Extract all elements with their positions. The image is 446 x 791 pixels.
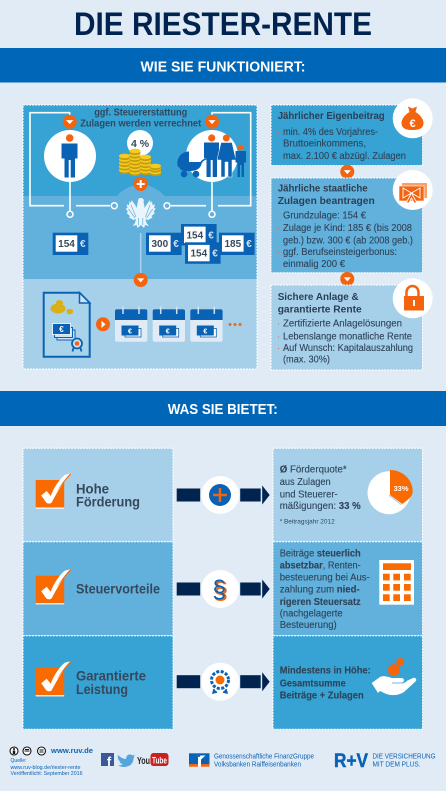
money tag: 154 xyxy=(53,233,88,255)
panel: sichere anlage xyxy=(271,278,433,370)
text block: Gesamtsumme xyxy=(280,678,346,689)
icon: arrow right xyxy=(205,115,219,129)
text block: Mindestens in Höhe: xyxy=(280,666,371,677)
arrow: paragraph: § xyxy=(212,576,226,604)
label xyxy=(76,668,146,697)
bullet list: Bruttoeinkommens, xyxy=(283,139,366,150)
bullet list: · xyxy=(277,127,280,138)
source text: Veröffentlicht: September 2016 xyxy=(10,771,83,777)
text block: zahlung zum nied- xyxy=(280,585,360,596)
icon: calculator xyxy=(379,560,414,605)
connector lines xyxy=(30,113,251,275)
text block: * Beitragsjahr 2012 xyxy=(280,518,335,525)
icon: padlock xyxy=(393,278,433,318)
footer xyxy=(10,746,436,777)
section band: was sie bietet: WAS SIE BIETET: xyxy=(168,402,278,418)
text block xyxy=(280,549,370,631)
icon: youtube xyxy=(137,753,168,767)
icon: gift voucher xyxy=(393,170,433,210)
bullet list: max. 2.100 € abzügl. Zulagen xyxy=(283,151,406,162)
arrow: plus xyxy=(177,476,270,514)
icon: calendar 2: € xyxy=(166,328,170,336)
text block: Beiträge + Zulagen xyxy=(280,690,364,701)
bullet list: · xyxy=(277,319,280,330)
label: Steuervorteile xyxy=(76,580,160,596)
title: DIE RIESTER-RENTE xyxy=(74,6,372,42)
money tag: 300: 300 xyxy=(151,239,169,250)
bullet list: · xyxy=(277,331,280,342)
icon: arrow right to calendars xyxy=(96,317,110,331)
text block: Beiträge steuerlich xyxy=(280,549,361,560)
icon: checkmark box xyxy=(36,474,71,509)
text block xyxy=(280,666,371,701)
bullet list: Grundzulage: 154 € xyxy=(283,210,366,221)
money tag: 300: € xyxy=(173,239,179,250)
money tag: 154 upper: 154 xyxy=(186,230,204,241)
icon: plus button xyxy=(134,177,148,191)
bullet list: geb.) bzw. 300 € (ab 2008 geb.) xyxy=(283,235,413,246)
panel: förderquote xyxy=(273,448,422,542)
source text: www.ruv-blog.de/riester-rente xyxy=(10,765,81,771)
icon: hand with coins xyxy=(372,658,416,695)
panel: flow diagram xyxy=(23,105,257,369)
text block: besteuerung bei Aus- xyxy=(280,573,370,584)
panel: benefit garantierte leistung xyxy=(23,636,173,729)
icon: family with pram xyxy=(177,130,246,182)
text block: aus Zulagen xyxy=(280,477,331,488)
money tag: 154 lower: 154 xyxy=(190,249,208,260)
label: Förderung xyxy=(76,494,140,510)
text block: Besteuerung) xyxy=(280,620,337,631)
panel background bands xyxy=(23,105,257,369)
r+v logo: R+V xyxy=(334,751,368,772)
bullet list: · xyxy=(277,210,280,221)
text block: (nachgelagerte xyxy=(280,609,343,620)
heading: Jährliche staatliche xyxy=(278,184,368,195)
bullet list: min. 4% des Vorjahres- xyxy=(283,127,378,138)
money tag: 154 lower: € xyxy=(212,249,218,260)
heading xyxy=(278,184,375,207)
heading: garantierte Rente xyxy=(278,304,362,315)
icon: checkmark box xyxy=(36,569,71,604)
icon: arrow between panels 2 xyxy=(340,272,354,286)
icon: arrow left xyxy=(63,115,77,129)
heading: Sichere Anlage & xyxy=(278,292,359,303)
heading: Zulagen beantragen xyxy=(278,196,375,207)
icon: youtube: You xyxy=(137,756,150,767)
icon: 4 percent bubble: 4 % xyxy=(131,138,150,150)
bullet list: ggf. Berufseinsteigerbonus: xyxy=(283,247,397,258)
money tag: 185: 185 xyxy=(224,239,242,250)
icon: arrow between panels 1 xyxy=(340,165,354,179)
panel: mindestens in höhe xyxy=(273,636,422,729)
panel: jährlicher eigenbeitrag xyxy=(271,98,433,166)
text block: Ø Förderquote* xyxy=(280,464,347,475)
money tag: 300 xyxy=(146,233,182,255)
r+v claim xyxy=(372,752,436,769)
money tag: 154 upper xyxy=(181,224,217,246)
text block xyxy=(280,464,361,525)
arrow: paragraph: § xyxy=(214,576,228,604)
text block: und Steuerer- xyxy=(280,489,338,500)
icon: coins xyxy=(119,149,161,176)
icon: twitter xyxy=(118,754,135,767)
bullet list: · xyxy=(277,343,280,354)
section band: was sie bietet xyxy=(0,391,446,426)
panel: benefit steuervorteile xyxy=(23,542,173,636)
r+v claim: DIE VERSICHERUNG xyxy=(372,752,436,760)
panel: steuerlich absetzbar xyxy=(273,542,422,636)
money tag: 185: € xyxy=(246,239,252,250)
bullet list: · xyxy=(277,223,280,234)
bank name xyxy=(214,752,314,769)
icon: arrow down to contract xyxy=(134,273,148,287)
icon: calendar 1: € xyxy=(128,328,132,336)
arrow: paragraph xyxy=(177,570,270,608)
icon: 4 percent bubble xyxy=(127,130,153,156)
bank name: Genossenschaftliche FinanzGruppe xyxy=(214,752,314,760)
panel: staatliche zulagen xyxy=(271,170,433,273)
pie chart: 33 percent xyxy=(368,470,413,514)
icon: checkmark box xyxy=(36,661,71,696)
icon: contract document xyxy=(44,293,90,357)
icon: money bag xyxy=(393,98,433,138)
icon: continuation dots xyxy=(228,323,242,326)
icon: volksbank logo xyxy=(189,753,210,767)
label: Hohe xyxy=(76,480,109,496)
bullet list xyxy=(277,319,413,366)
bullet list: (max. 30%) xyxy=(283,355,330,366)
caption: steuererstattung: Zulagen werden verrechnet xyxy=(80,119,202,130)
icon: facebook xyxy=(101,753,114,769)
text block: rigeren Steuersatz xyxy=(280,597,361,608)
section band: wie sie funktioniert: WIE SIE FUNKTIONIERT: xyxy=(140,60,306,76)
money tag: 154 lower xyxy=(185,242,221,264)
icon: calendar 1 xyxy=(115,306,147,342)
money tag: 154: 154 xyxy=(58,239,75,250)
money tag: 185 xyxy=(219,233,255,255)
icon: youtube: Tube xyxy=(152,756,167,766)
bullet list: einmalig 200 € xyxy=(283,259,345,270)
label: Leistung xyxy=(76,681,128,697)
text block: mäßigungen: 33 % xyxy=(280,501,361,512)
heading: Jährlicher Eigenbeitrag xyxy=(278,111,385,122)
panel: benefit hohe förderung xyxy=(23,448,173,542)
icon: facebook: f xyxy=(107,754,112,769)
caption: steuererstattung: ggf. Steuererstattung xyxy=(94,108,187,118)
text block: absetzbar, Renten- xyxy=(280,561,361,572)
icon: contract document: € xyxy=(59,325,64,334)
icon: calendar 3: € xyxy=(203,328,207,336)
bullet list: · xyxy=(277,247,280,258)
icon: calendar 2 xyxy=(153,306,185,342)
money tag: 154: € xyxy=(80,239,86,250)
caption: steuererstattung xyxy=(80,108,202,130)
icon: calendar 3 xyxy=(190,306,223,342)
bank name: Volksbanken Raiffeisenbanken xyxy=(214,760,301,769)
bullet list: Zertifizierte Anlagelösungen xyxy=(283,319,402,330)
icon: federal eagle xyxy=(126,198,156,228)
section band: wie sie funktioniert xyxy=(0,48,446,82)
icon: creative commons badges xyxy=(10,747,46,755)
bullet list xyxy=(277,210,413,270)
label: Garantierte xyxy=(76,668,146,684)
icon: person xyxy=(44,130,96,182)
source text: www.ruv.de xyxy=(50,746,93,755)
source text: Quelle: xyxy=(10,758,26,764)
bullet list: Lebenslange monatliche Rente xyxy=(283,331,412,342)
money tag: 154 upper: € xyxy=(208,230,214,241)
r+v claim: MIT DEM PLUS. xyxy=(372,760,421,769)
bullet list: Auf Wunsch: Kapitalauszahlung xyxy=(283,343,413,354)
bullet list xyxy=(277,127,406,162)
label xyxy=(76,480,140,510)
heading xyxy=(278,292,362,315)
bullet list: Zulage je Kind: 185 € (bis 2008 xyxy=(283,223,412,234)
arrow: seal xyxy=(177,663,270,701)
icon: money bag: € xyxy=(409,118,416,130)
source text xyxy=(10,746,93,777)
pie chart: 33 percent: 33% xyxy=(393,484,409,493)
